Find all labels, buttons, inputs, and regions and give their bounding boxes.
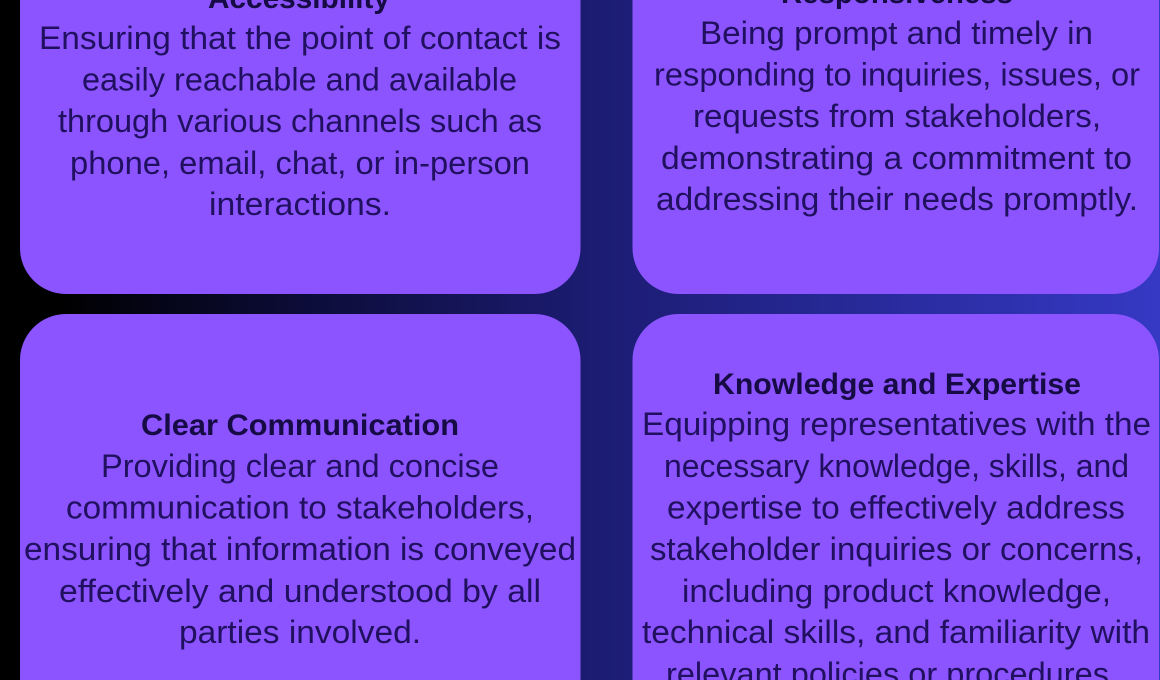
text block: accessibility description: Ensuring that the point of contact is	[39, 20, 561, 56]
panel: clear communication	[20, 314, 580, 680]
text block: responsiveness description: addressing their needs promptly.	[656, 181, 1138, 217]
text block: responsiveness description: demonstrating a commitment to	[661, 140, 1132, 176]
text block: accessibility description: through various channels such as	[58, 103, 542, 139]
text block: knowledge and expertise description	[642, 406, 1151, 680]
text block: clear communication description: effectively and understood by all	[59, 573, 541, 609]
panel: knowledge and expertise	[632, 314, 1159, 680]
text block: accessibility description	[39, 20, 561, 222]
text block: clear communication description: ensuring that information is conveyed	[24, 531, 576, 567]
text block: responsiveness description: requests from stakeholders,	[693, 98, 1101, 134]
text block: knowledge and expertise description: necessary knowledge, skills, and	[664, 448, 1129, 484]
text block: clear communication description: Providing clear and concise	[101, 448, 499, 484]
text block: responsiveness description: Being prompt and timely in	[700, 15, 1093, 51]
panel: responsiveness	[632, 0, 1159, 294]
text block: responsiveness description	[654, 15, 1140, 217]
heading: clear communication: Clear Communication	[141, 409, 459, 442]
text block: clear communication description: parties involved.	[179, 614, 421, 650]
text block: knowledge and expertise description: Equipping representatives with the	[642, 406, 1151, 442]
text block: accessibility description: interactions.	[209, 186, 391, 222]
text block: knowledge and expertise description: technical skills, and familiarity with	[642, 614, 1150, 650]
text block: clear communication description	[24, 448, 576, 650]
text block: knowledge and expertise description: stakeholder inquiries or concerns,	[650, 531, 1143, 567]
text block: clear communication description: communication to stakeholders,	[66, 490, 534, 526]
text block: knowledge and expertise description: including product knowledge,	[682, 573, 1111, 609]
text block: knowledge and expertise description: expertise to effectively address	[667, 490, 1125, 526]
panel: accessibility	[20, 0, 580, 294]
text block: accessibility description: phone, email, chat, or in-person	[70, 145, 530, 181]
text block: accessibility description: easily reachable and available	[82, 62, 517, 98]
text block: responsiveness description: responding to inquiries, issues, or	[654, 56, 1140, 92]
heading: knowledge and expertise: Knowledge and Expertise	[713, 368, 1081, 401]
